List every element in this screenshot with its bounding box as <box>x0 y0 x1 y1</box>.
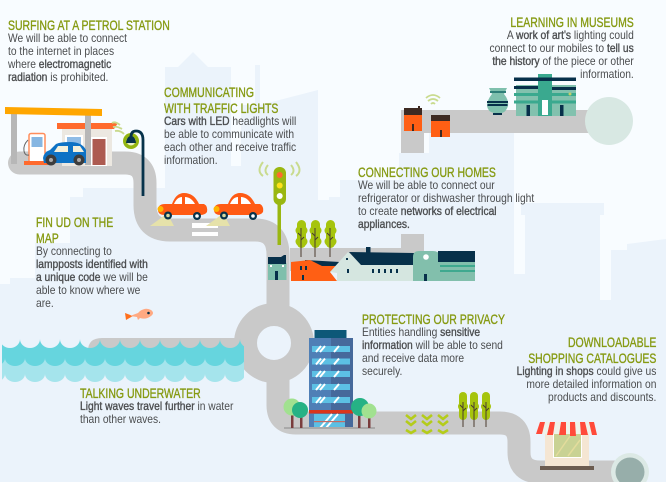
body text: Light waves travel further in water <box>80 399 233 413</box>
body text: information will be able to send <box>362 338 502 352</box>
body text: are. <box>36 296 54 310</box>
heading: FIN UD ON THE <box>36 214 113 230</box>
text block: learning in museums <box>490 14 634 81</box>
body text: products and discounts. <box>548 390 656 404</box>
body text: connect to our mobiles to tell us <box>490 41 634 55</box>
heading <box>36 214 113 246</box>
icon: wifi signal <box>426 95 440 104</box>
body text: By connecting to <box>36 244 112 258</box>
icon: three trees <box>296 220 336 257</box>
heading: COMMUNICATING <box>164 84 253 100</box>
body text: Entities handling sensitive <box>362 325 480 339</box>
roundabout <box>246 314 302 372</box>
icon: vase <box>487 88 508 115</box>
icon: petrol station <box>5 107 118 166</box>
body text: information. <box>164 153 217 167</box>
text block: communicating with traffic lights <box>164 84 296 167</box>
text block: fin ud on the map <box>36 214 148 310</box>
icon: grass <box>406 415 448 433</box>
body text: than other waves. <box>80 412 161 426</box>
body text: appliances. <box>358 217 410 231</box>
heading: MAP <box>36 230 59 246</box>
body text: be able to communicate with <box>164 127 294 141</box>
heading: CONNECTING OUR HOMES <box>358 164 496 180</box>
body text: Cars with LED headlights will <box>164 114 296 128</box>
end circle: shop <box>611 453 649 482</box>
heading: SURFING AT A PETROL STATION <box>8 17 170 33</box>
body text: radiation is prohibited. <box>8 70 108 84</box>
heading: DOWNLOADABLE <box>568 334 656 350</box>
heading: WITH TRAFFIC LIGHTS <box>164 100 278 116</box>
text block: talking underwater <box>80 385 234 426</box>
body text <box>358 178 534 231</box>
body text: lampposts identified with <box>36 257 148 271</box>
body text <box>490 28 634 81</box>
icon: shop <box>536 422 597 470</box>
icon: car one <box>150 193 207 226</box>
body text: refrigerator or dishwasher through light <box>358 191 534 205</box>
body text: a unique code we will be <box>36 270 148 284</box>
icon: street lamp <box>112 122 143 196</box>
body text: Lighting in shops could give us <box>516 364 656 378</box>
heading <box>528 334 656 366</box>
icon: office building <box>309 330 353 429</box>
waves <box>0 339 265 382</box>
icon: crosswalk <box>192 223 218 236</box>
body text: information. <box>580 67 634 81</box>
heading: TALKING UNDERWATER <box>80 385 201 401</box>
icon: row of houses <box>268 247 475 281</box>
text block: downloadable shopping catalogues <box>516 334 656 404</box>
body text: securely. <box>362 364 402 378</box>
text block: surfing at a petrol station <box>8 17 170 84</box>
heading <box>164 84 278 116</box>
icon: car two <box>206 193 263 226</box>
body text: able to know where we <box>36 283 140 297</box>
icon: three trees by the road <box>458 392 491 427</box>
icon: traffic light <box>260 162 300 245</box>
body text: We will be able to connect <box>8 31 127 45</box>
text block: connecting our homes <box>358 164 534 231</box>
body text <box>516 364 656 404</box>
body text: to create networks of electrical <box>358 204 497 218</box>
road network <box>20 122 630 472</box>
end circle: museums <box>585 97 633 145</box>
heading: PROTECTING OUR PRIVACY <box>362 311 504 327</box>
body text: to the internet in places <box>8 44 114 58</box>
icon: museum <box>514 74 576 116</box>
body text <box>80 399 234 426</box>
heading: SHOPPING CATALOGUES <box>528 350 656 366</box>
body text: We will be able to connect our <box>358 178 495 192</box>
text block: protecting our privacy <box>362 311 505 378</box>
body text <box>164 114 296 167</box>
body text <box>362 325 502 378</box>
body text <box>8 31 127 84</box>
body text <box>36 244 148 310</box>
icon: trees by building <box>284 398 376 429</box>
body text: A work of art's lighting could <box>507 28 634 42</box>
heading: LEARNING IN MUSEUMS <box>511 14 634 30</box>
icon: two orange houses <box>404 106 450 137</box>
body text: where electromagnetic <box>8 57 111 71</box>
body text: and receive data more <box>362 351 464 365</box>
body text: each other and receive traffic <box>164 140 296 154</box>
body text: more detailed information on <box>526 377 656 391</box>
body text: the history of the piece or other <box>493 54 634 68</box>
icon: fish <box>125 309 153 320</box>
